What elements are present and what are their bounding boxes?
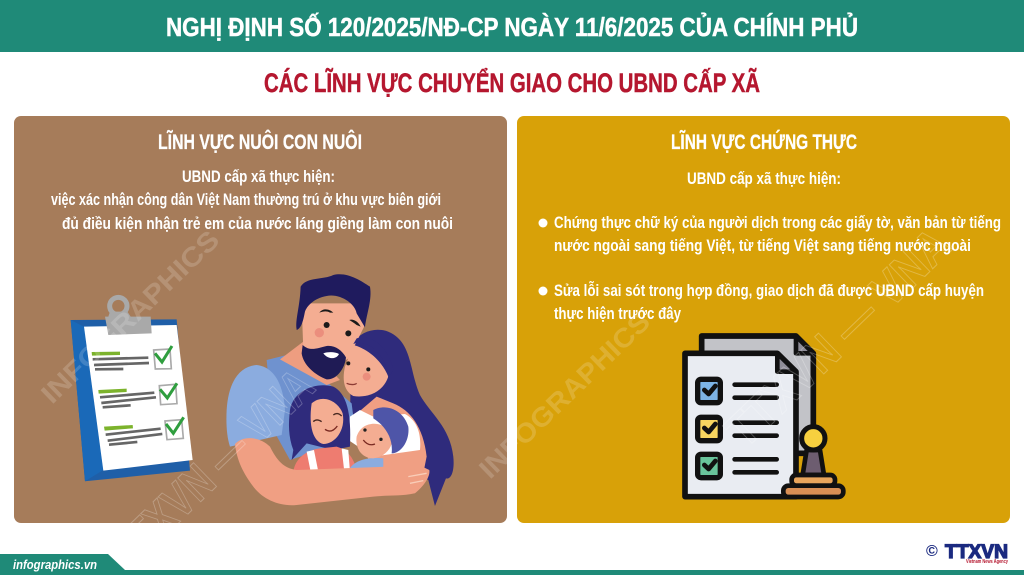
man face marks <box>319 309 361 336</box>
mother body <box>353 397 427 473</box>
girl face <box>311 399 343 444</box>
girl body <box>293 447 357 472</box>
bullet: second item <box>538 281 984 323</box>
watermarks: INFOGRAPHICS <box>35 224 225 409</box>
header band: NGHỊ ĐỊNH SỐ 120/2025/NĐ-CP NGÀY 11/6/2025 CỦA CHÍNH PHỦ <box>166 11 858 42</box>
man neck <box>280 342 340 385</box>
logo <box>926 542 1008 565</box>
bullet: first item <box>538 214 1001 255</box>
text block: adoption <box>51 168 453 233</box>
man shirt body <box>267 353 353 460</box>
watermark outlines: TTXVN — VNA <box>716 218 961 458</box>
logo: TTXVN <box>945 542 1008 563</box>
icon: documents and stamp <box>685 336 843 497</box>
icon: clipboard <box>71 297 193 481</box>
logo: Vietnam News Agency <box>966 559 1008 565</box>
watermark outlines: TTXVN — VNA <box>101 359 325 575</box>
panel heading: adoption: LĨNH VỰC NUÔI CON NUÔI <box>158 130 362 154</box>
footer site link: infographics.vn <box>13 557 97 572</box>
header band <box>0 0 1024 52</box>
man arm <box>235 438 429 505</box>
watermark outlines <box>101 218 961 575</box>
watermarks: INFOGRAPHICS <box>473 306 656 484</box>
girl hair <box>289 385 350 460</box>
text block: intro: UBND cấp xã thực hiện: <box>687 170 841 188</box>
watermarks <box>35 224 656 484</box>
footer <box>0 554 1024 575</box>
bullet: second item: thực hiện trước đây <box>554 305 682 323</box>
mother hair back <box>350 330 454 506</box>
man hair <box>296 274 371 330</box>
illustration: family <box>226 274 454 506</box>
logo: © <box>926 543 938 560</box>
text block: adoption: việc xác nhận công dân Việt Nam thường trú ở khu vực biên giới <box>51 191 441 209</box>
baby <box>348 407 409 473</box>
clip <box>105 297 152 335</box>
subtitle: CÁC LĨNH VỰC CHUYỂN GIAO CHO UBND CẤP XÃ <box>264 67 760 98</box>
mother dress <box>348 410 420 457</box>
panel: adoption <box>14 116 507 523</box>
man beard <box>302 345 346 379</box>
mother face <box>344 345 388 396</box>
man sleeve <box>226 365 285 447</box>
panel heading: authentication: LĨNH VỰC CHỨNG THỰC <box>671 130 857 154</box>
panel: authentication <box>517 116 1010 523</box>
text block: adoption: đủ điều kiện nhận trẻ em của nước láng giềng làm con nuôi <box>62 215 453 233</box>
text block: adoption: UBND cấp xã thực hiện: <box>182 168 335 186</box>
man head <box>302 303 365 373</box>
